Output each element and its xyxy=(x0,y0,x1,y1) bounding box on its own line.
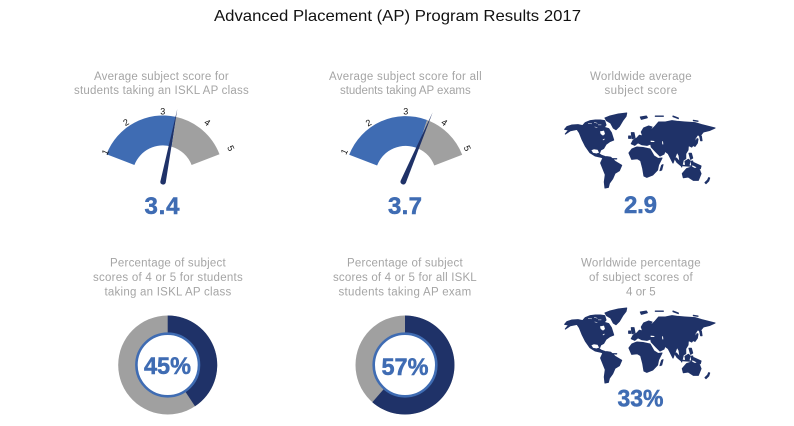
text: ISKL class donut caption: taking an ISKL AP class xyxy=(104,286,232,298)
panel: all students percentage donut xyxy=(333,258,477,414)
panel: worldwide average xyxy=(565,71,715,219)
text: all students gauge caption: Average subject score for all xyxy=(329,71,482,83)
value: 3.4: 3.4 xyxy=(144,193,180,220)
panel: ISKL AP class average gauge xyxy=(74,71,249,220)
text: all students donut caption: students taking AP exam xyxy=(338,286,472,298)
text: ISKL class donut caption xyxy=(93,258,243,298)
value: 33%: 33% xyxy=(618,386,664,412)
value: 2.9: 2.9 xyxy=(624,192,657,219)
text: all students donut caption: Percentage of subject xyxy=(347,258,464,270)
text: worldwide percentage caption: of subject scores of xyxy=(589,272,694,284)
gauge: all students score 3.7: 2 xyxy=(364,117,373,128)
panel: worldwide percentage xyxy=(565,258,715,412)
value: 45%: 45% xyxy=(144,353,191,380)
gauge: all students score 3.7: 3 xyxy=(403,106,408,116)
gauge: ISKL class score 3.4: 2 xyxy=(121,117,131,128)
gauge: ISKL class score 3.4 xyxy=(100,106,236,185)
value: 3.7: 3.7 xyxy=(388,193,422,220)
donut chart: 57% xyxy=(356,316,454,414)
text: all students donut caption xyxy=(333,258,477,298)
gauge: all students score 3.7: 5 xyxy=(462,144,473,153)
text: all students gauge caption xyxy=(329,71,482,97)
gauge: ISKL class score 3.4: 3 xyxy=(160,106,165,116)
text: ISKL class donut caption: Percentage of subject xyxy=(110,258,226,270)
text: ISKL class donut caption: scores of 4 or 5 for students xyxy=(93,272,243,284)
gauge: all students score 3.7 xyxy=(339,106,473,185)
text: ISKL class gauge caption: students taking an ISKL AP class xyxy=(74,85,249,97)
text: worldwide percentage caption xyxy=(581,258,701,298)
title: Advanced Placement (AP) Program Results 2017 xyxy=(214,8,581,25)
text: worldwide percentage caption: Worldwide percentage xyxy=(581,258,701,270)
donut chart: 45% xyxy=(118,316,217,414)
gauge: all students score 3.7: 4 xyxy=(439,117,449,128)
panel: all students average gauge xyxy=(329,71,482,220)
map: world xyxy=(565,308,715,383)
text: worldwide average caption: subject score xyxy=(604,85,678,97)
text: all students gauge caption: students taking AP exams xyxy=(340,85,471,97)
gauge: ISKL class score 3.4: 1 xyxy=(100,148,111,157)
gauge: ISKL class score 3.4: 4 xyxy=(202,117,212,128)
panel: ISKL AP class percentage donut xyxy=(93,258,243,414)
gauge: all students score 3.7: 1 xyxy=(339,147,350,156)
text: worldwide average caption: Worldwide average xyxy=(590,71,692,83)
text: ISKL class gauge caption xyxy=(74,71,249,97)
text: worldwide average caption xyxy=(590,71,692,97)
gauge: ISKL class score 3.4: 5 xyxy=(225,144,236,153)
text: ISKL class gauge caption: Average subject score for xyxy=(94,71,229,83)
text: all students donut caption: scores of 4 or 5 for all ISKL xyxy=(333,272,477,284)
map: world xyxy=(565,113,715,188)
text: worldwide percentage caption: 4 or 5 xyxy=(626,286,656,298)
value: 57%: 57% xyxy=(382,354,428,381)
